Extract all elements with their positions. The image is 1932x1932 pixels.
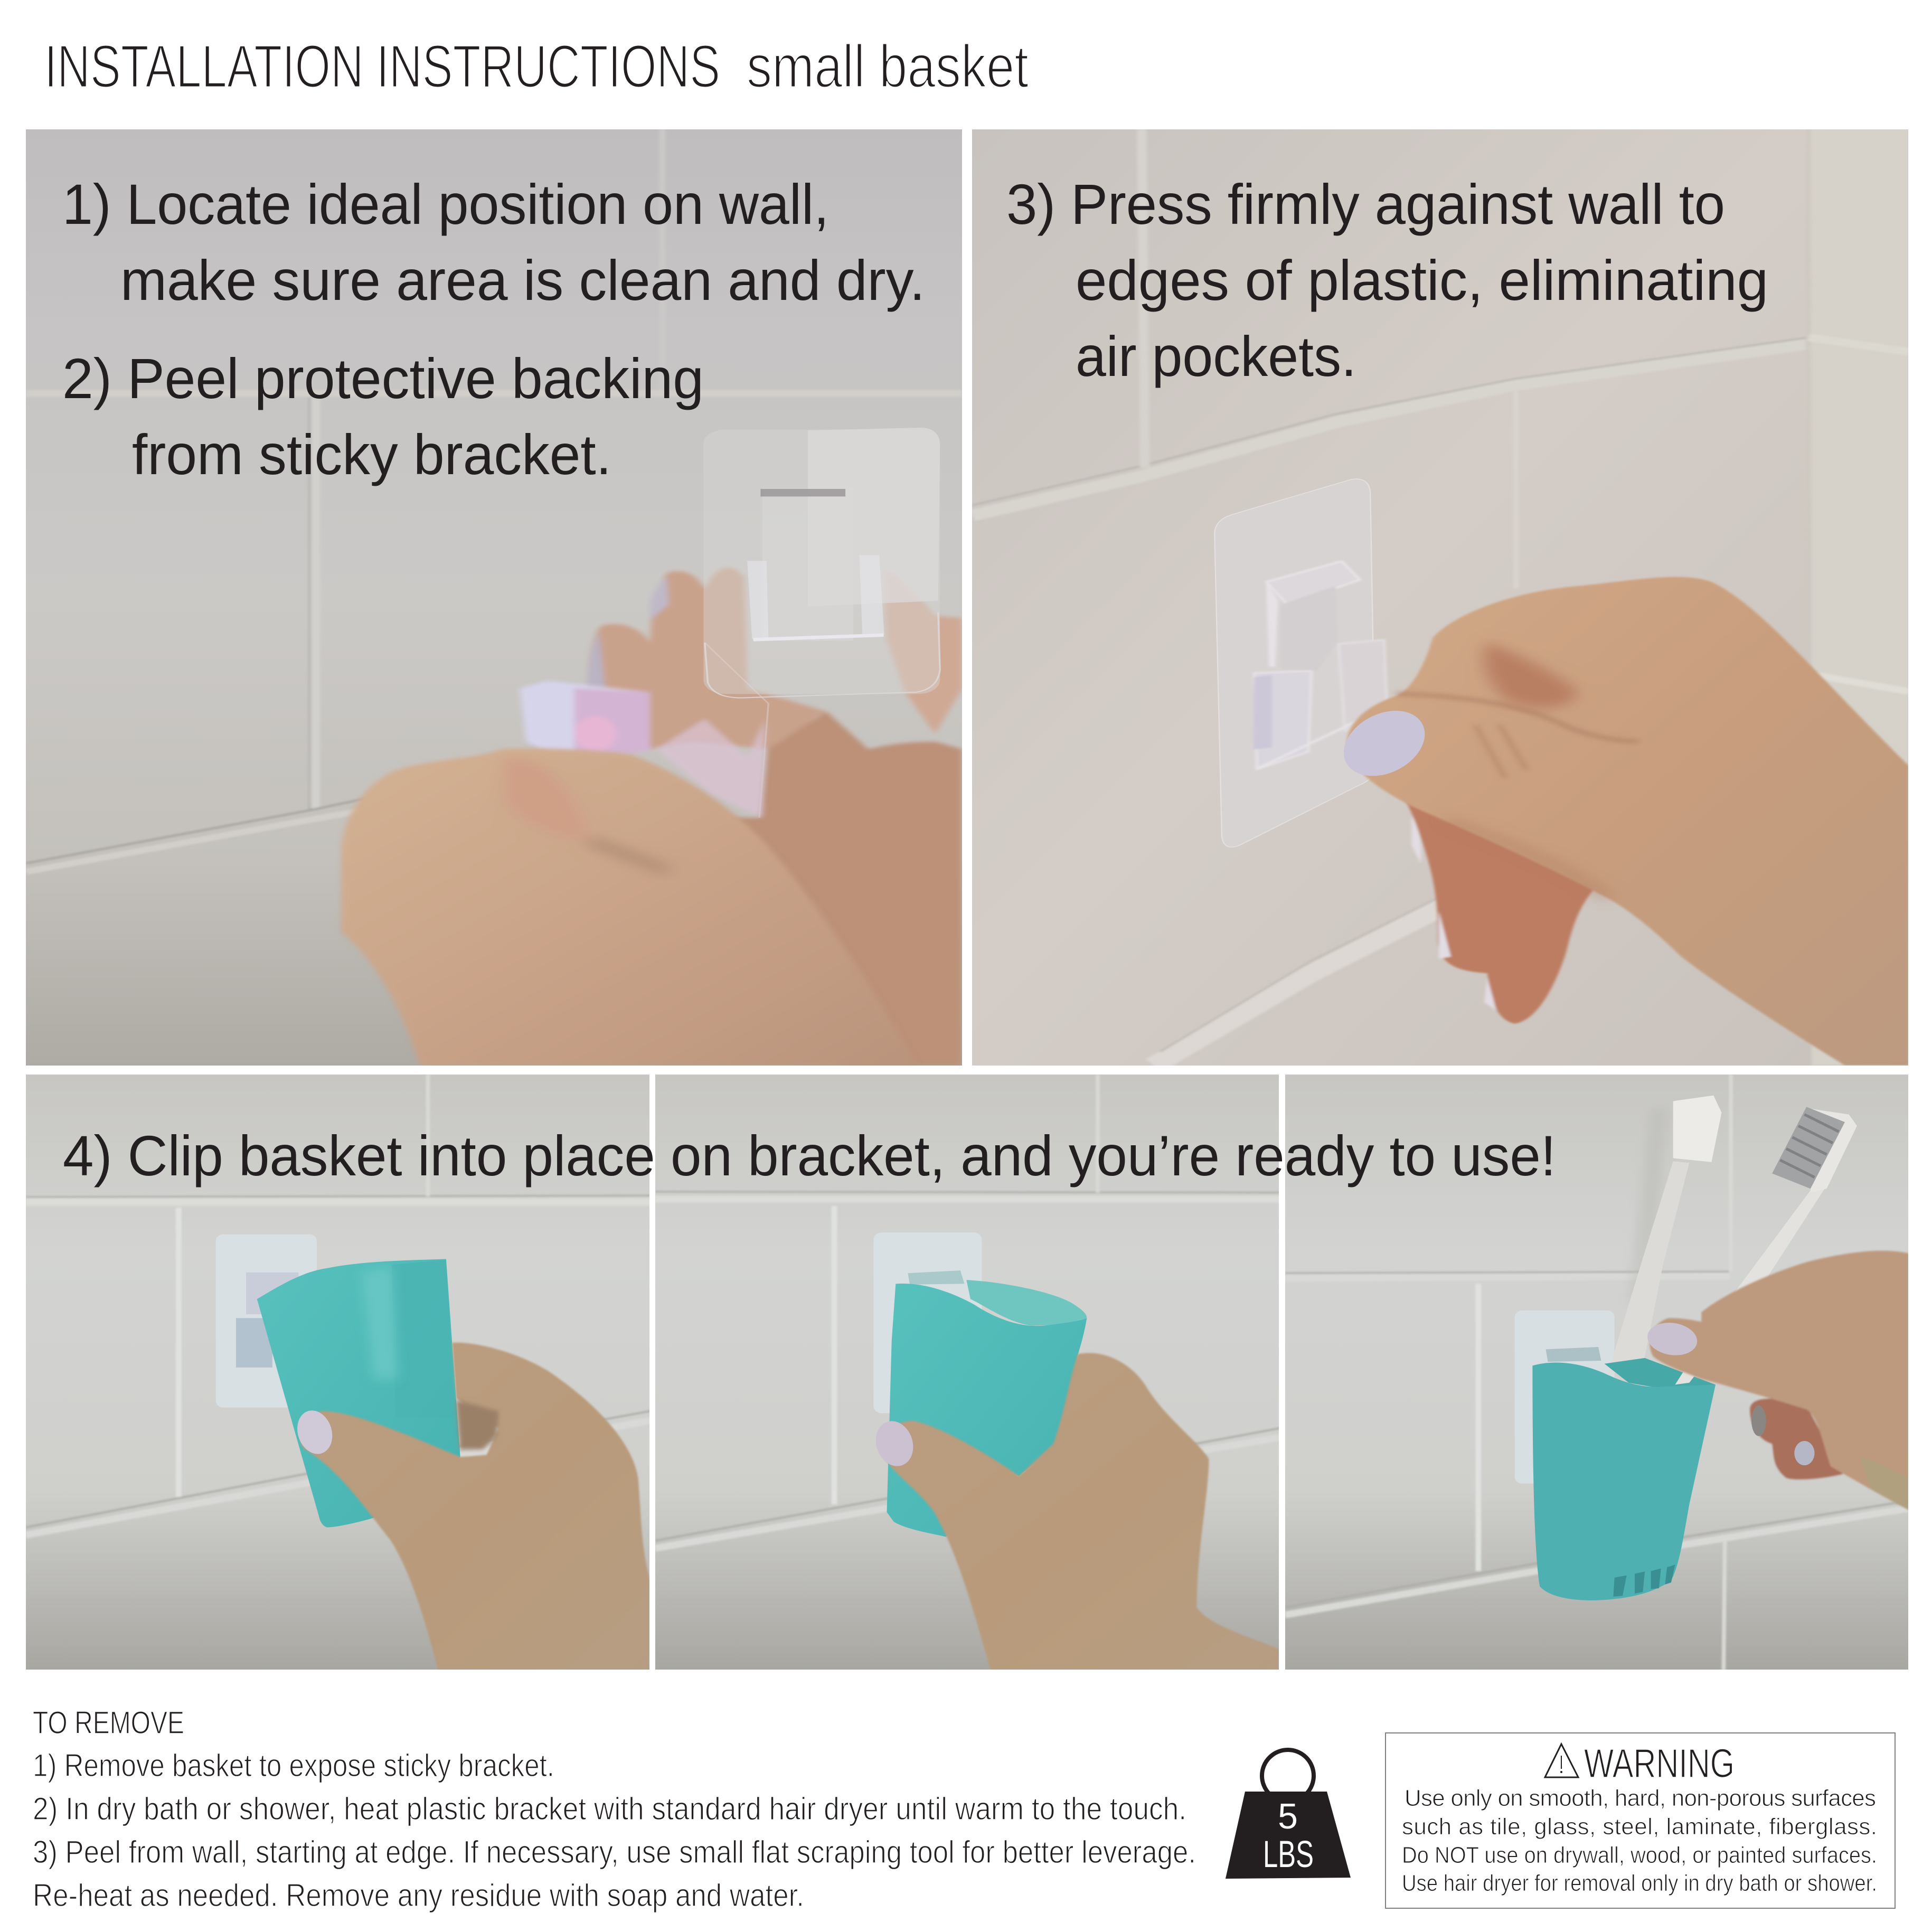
hand — [300, 1343, 659, 1670]
text block: to remove: 2) In dry bath or shower, heat plastic bracket with standard hair dryer until warm to the touch. — [33, 1791, 1186, 1826]
hand — [881, 1353, 1289, 1670]
text: steps 1 and 2: 1) Locate ideal position on wall, — [62, 172, 829, 236]
thumb nail — [293, 1407, 337, 1458]
icon: 5 lbs weight: 5 — [1278, 1796, 1298, 1836]
front hand — [341, 749, 917, 1066]
text block: to remove: Re-heat as needed. Remove any residue with soap and water. — [33, 1878, 804, 1913]
wall tile grout lines — [1285, 1075, 1909, 1670]
thumb nail — [1327, 701, 1441, 786]
text block: to remove: 1) Remove basket to expose sticky bracket. — [33, 1748, 554, 1783]
text: steps 1 and 2: 2) Peel protective backing — [62, 346, 704, 410]
wall bracket — [1515, 1311, 1615, 1484]
teal basket — [257, 1259, 460, 1528]
title: INSTALLATION INSTRUCTIONS — [44, 33, 720, 100]
text: steps 1 and 2: from sticky bracket. — [132, 422, 611, 486]
icon: 5 lbs weight — [1226, 1750, 1351, 1879]
bracket hook and side tabs — [1254, 561, 1387, 769]
text: step 3: air pockets. — [1076, 324, 1356, 388]
text: step 3: 3) Press firmly against wall to — [1006, 172, 1725, 236]
teal basket — [1532, 1362, 1716, 1600]
wall tile grout lines — [26, 129, 963, 872]
text block: to remove — [33, 1705, 1196, 1913]
wall bracket — [216, 1234, 317, 1408]
title: small basket — [747, 33, 1029, 100]
text block: to remove: 3) Peel from wall, starting at edge. If necessary, use small flat scraping tool for better leverage. — [33, 1834, 1196, 1870]
panel: step 3 photo — [972, 128, 1909, 1066]
text: step 3 — [1006, 172, 1768, 388]
wall bracket — [873, 1232, 982, 1413]
finger nails — [1645, 1319, 1815, 1465]
panel: step 4 photo C — [1285, 1075, 1909, 1670]
hand — [1650, 1251, 1909, 1510]
text: step 3: edges of plastic, eliminating — [1076, 248, 1768, 312]
text: steps 1 and 2: make sure area is clean and dry. — [120, 248, 925, 312]
warning text — [1402, 1785, 1877, 1896]
clear plastic bracket plate — [703, 428, 940, 694]
rear hand palm and fingers — [587, 568, 963, 1066]
wall tile grout lines — [26, 1075, 659, 1535]
warning text: Use only on smooth, hard, non-porous surfaces — [1405, 1785, 1876, 1811]
wall tile grout lines — [972, 128, 1909, 1066]
hand — [1347, 577, 1909, 1066]
teal basket — [887, 1280, 1087, 1537]
fingers — [1397, 778, 1596, 1024]
toothbrush: grey bristles — [1675, 1107, 1857, 1384]
icon: 5 lbs weight: LBS — [1263, 1834, 1314, 1876]
text: step 4: 4) Clip basket into place on bracket, and you’re ready to use! — [63, 1124, 1556, 1188]
wall tile grout lines — [655, 1075, 1289, 1548]
clear plastic bracket plate — [1214, 479, 1375, 847]
icon: warning triangle — [1545, 1744, 1578, 1777]
warning text: such as tile, glass, steel, laminate, fiberglass. — [1402, 1814, 1877, 1840]
panel: step 4 photo A — [26, 1075, 659, 1670]
warning text: Do NOT use on drywall, wood, or painted surfaces. — [1402, 1842, 1877, 1868]
bracket hook and side tabs — [705, 488, 940, 818]
warning text: Use hair dryer for removal only in dry bath or shower. — [1402, 1870, 1877, 1896]
toothbrush: white bristles — [1608, 1096, 1722, 1377]
panel: step 4 photo B — [655, 1075, 1289, 1670]
text: steps 1 and 2 — [62, 172, 925, 486]
text block: to remove: TO REMOVE — [33, 1705, 184, 1740]
thumb nail — [871, 1417, 918, 1470]
peeled protective backing — [520, 681, 766, 818]
teal basket back rim — [1605, 1358, 1716, 1389]
panel: steps 1 and 2 photo — [26, 129, 963, 1066]
warning box — [1386, 1733, 1895, 1908]
warning heading: WARNING — [1584, 1741, 1735, 1786]
